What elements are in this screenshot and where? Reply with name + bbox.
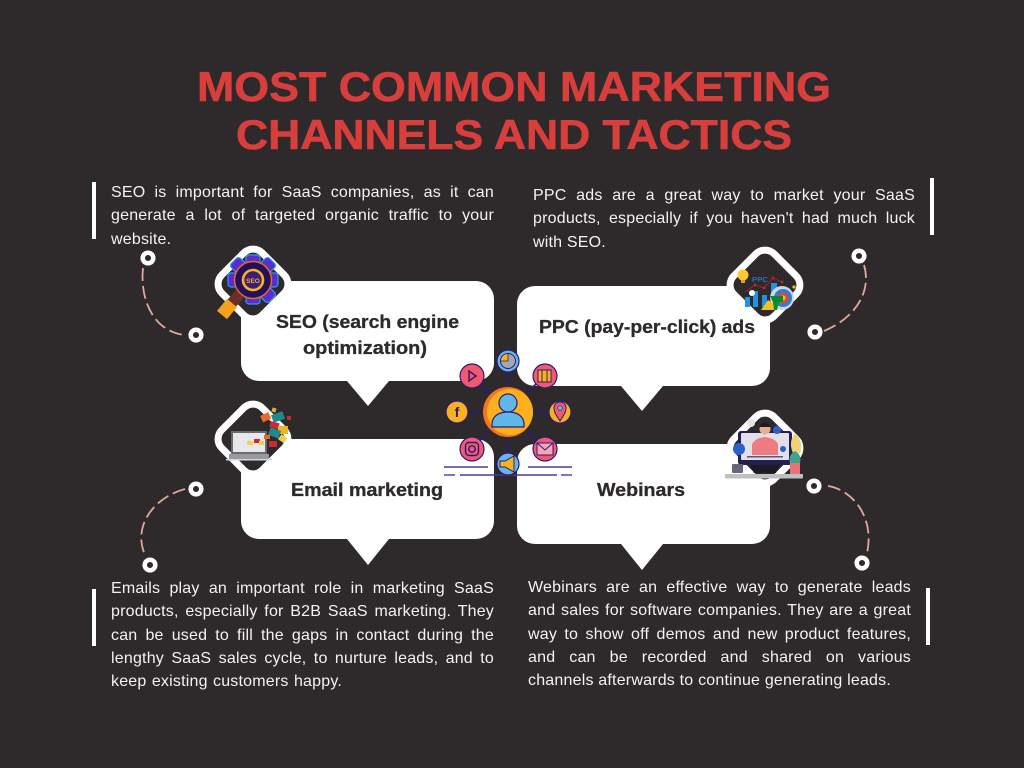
text block: Webinars description: and sales for software companies. They are a great bbox=[528, 602, 911, 619]
card: Webinars bbox=[517, 444, 770, 570]
badge: PPC diamond bbox=[725, 245, 805, 325]
icon: PPC chart and target: PPC bbox=[752, 275, 769, 284]
connector: SEO bbox=[142, 253, 201, 340]
icon: location pin bbox=[549, 401, 571, 423]
ground lines bbox=[444, 467, 572, 475]
icon: instagram bbox=[460, 437, 484, 461]
icon: play bbox=[460, 364, 484, 388]
icon: user bbox=[483, 387, 533, 437]
text block: Email description: Emails play an important role in marketing SaaS bbox=[111, 580, 494, 597]
card: SEO: SEO (search engine bbox=[276, 311, 459, 332]
icon: SEO gear and magnifier bbox=[222, 255, 278, 315]
icon: central marketing hub bbox=[444, 350, 572, 475]
text block: PPC description: with SEO. bbox=[533, 234, 606, 250]
hub connecting lines bbox=[468, 372, 548, 452]
text block: PPC description bbox=[533, 187, 915, 250]
text block: Email description bbox=[111, 580, 494, 690]
icon: PPC chart and target bbox=[738, 270, 796, 310]
card: Email marketing bbox=[241, 439, 494, 565]
text block: Email description: keep existing customers happy. bbox=[111, 673, 342, 690]
text block: PPC description: products, especially if you haven't had much luck bbox=[533, 210, 915, 227]
text block: Webinars description bbox=[528, 579, 911, 689]
card: PPC: PPC (pay-per-click) ads bbox=[539, 316, 755, 337]
icon: shopping bag bbox=[533, 364, 557, 388]
text block: PPC description: PPC ads are a great way to market your SaaS bbox=[533, 187, 915, 204]
badge: Email diamond bbox=[213, 399, 293, 479]
badge: SEO diamond bbox=[213, 244, 293, 324]
text block: SEO description: generate a lot of targeted organic traffic to your bbox=[111, 207, 494, 224]
card: Email marketing: Email marketing bbox=[291, 479, 443, 500]
text block: Email description: can be used to fill the gaps in contact during the bbox=[111, 626, 494, 644]
icon: SEO gear and magnifier: SEO bbox=[246, 278, 260, 285]
icon: megaphone bbox=[497, 453, 519, 475]
text block: Webinars description: Webinars are an effective way to generate leads bbox=[528, 579, 911, 596]
card: SEO bbox=[241, 281, 494, 406]
card: Webinars: Webinars bbox=[597, 479, 685, 500]
icon: mail bbox=[533, 437, 557, 461]
connector: Email bbox=[141, 484, 201, 570]
text block: SEO description bbox=[111, 184, 494, 248]
text block: SEO description: website. bbox=[111, 230, 171, 248]
connector: PPC bbox=[810, 251, 866, 337]
text block: Webinars description: channels afterwards to continue generating leads. bbox=[528, 672, 891, 689]
icon: webinar screen bbox=[725, 419, 803, 478]
text block: SEO description: SEO is important for SaaS companies, as it can bbox=[111, 184, 494, 201]
title: CHANNELS AND TACTICS bbox=[236, 111, 792, 158]
connector: Webinars bbox=[809, 481, 869, 568]
icon: facebook: f bbox=[455, 404, 460, 420]
text block: Email description: lengthy SaaS sales cycle, to nurture leads, and to bbox=[111, 650, 494, 667]
icon: pie chart bbox=[497, 350, 519, 372]
text block: Email description: products, especially for B2B SaaS marketing. They bbox=[111, 603, 494, 620]
badge: Webinars diamond bbox=[725, 408, 805, 488]
title bbox=[197, 63, 831, 158]
text block: Webinars description: and can be recorded and shared on various bbox=[528, 649, 911, 666]
title: MOST COMMON MARKETING bbox=[197, 63, 831, 110]
card: PPC bbox=[517, 286, 770, 411]
text block: Webinars description: way to show off demos and new product features, bbox=[528, 626, 911, 642]
icon: laptop and envelopes bbox=[226, 407, 291, 460]
card: SEO: optimization) bbox=[303, 337, 427, 358]
